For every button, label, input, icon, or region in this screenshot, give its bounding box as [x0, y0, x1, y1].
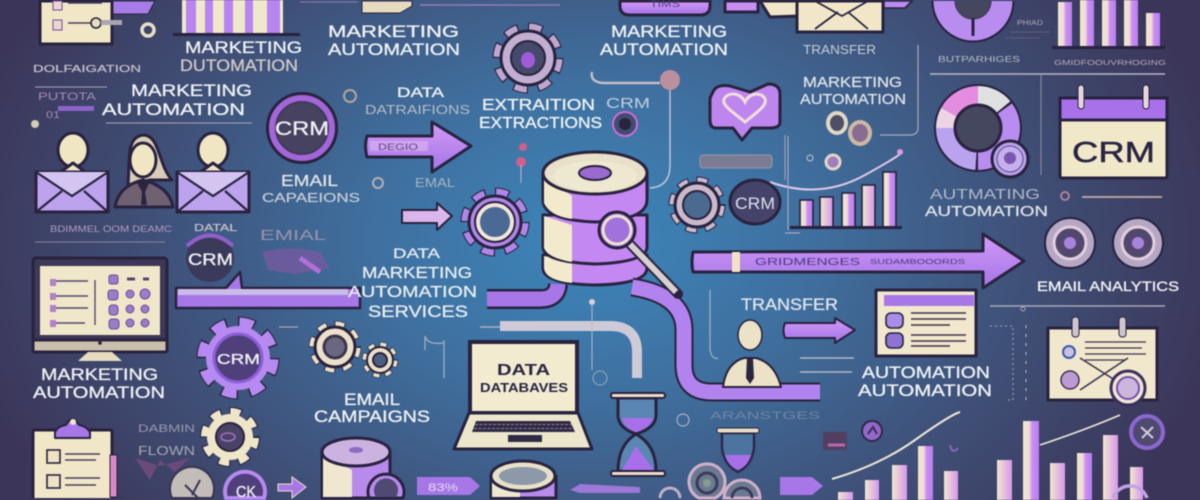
text: dabmin flown [135, 423, 195, 480]
text: transfer: TRANSFER [741, 295, 838, 314]
text: data marketing automation services [348, 245, 477, 321]
icon: lower left database [322, 438, 404, 498]
icon: CRM calendar: CRM [1072, 137, 1155, 169]
arrows: bottom purple tags: 83% [428, 482, 458, 494]
icon: woman in suit [115, 135, 173, 207]
arrow: big purple right arrow: GRIDMENGES [755, 257, 861, 268]
icon: CRM gear [203, 323, 273, 393]
text: data extractions faded: DATRAIFIONS [365, 102, 470, 117]
bar chart: bottom right [997, 415, 1143, 500]
icon: CRM badge: CRM [735, 194, 775, 213]
pill: top center [620, 0, 710, 15]
heading: marketing automation monitor: AUTOMATION [33, 383, 165, 402]
icon: twin cream gears [279, 325, 395, 375]
heading: marketing dutomation [180, 38, 302, 75]
heading: marketing automation centre: MARKETING [611, 22, 727, 41]
arrow: big purple right arrow: SUDAMBOOORDS [870, 259, 966, 266]
text: and email: EMAL [415, 175, 455, 190]
icon: laptop [454, 342, 592, 449]
pipe: database left outlet [487, 284, 558, 299]
arrow: pink right arrow [366, 122, 471, 172]
panel: form card [876, 290, 976, 356]
text: data marketing automation services: AUTOMATION [348, 284, 477, 301]
icon: lower centre database [491, 461, 556, 498]
icon: central database [543, 152, 647, 285]
heading: marketing automation right [800, 45, 918, 135]
text: automating automation [925, 186, 1048, 220]
smudged note: PUTOTA [38, 91, 97, 103]
text: faded crm [186, 234, 234, 282]
caption row under people: DATAL [194, 223, 238, 234]
arrow: small lilac arrow [402, 203, 452, 230]
icon: laptop: DATABAVES [480, 380, 568, 395]
text: faded challenges: ARANSTGES [710, 410, 820, 422]
text: faded email smudge [260, 227, 330, 274]
icons: bottom badges and arrow [170, 467, 306, 500]
icon: fader bar [700, 135, 785, 180]
icon: CRM calendar [1060, 85, 1167, 178]
icon: heart chat bubble [710, 84, 780, 140]
text: email capaeions: EMAIL [281, 173, 338, 190]
heading: marketing automation left: MARKETING [131, 81, 252, 100]
icon: CRM badge [730, 180, 780, 224]
icon: small rule node [1061, 192, 1162, 200]
bar chart: top left [173, 0, 300, 36]
bar chart: bottom middle [832, 412, 960, 500]
icon: small hourglass [717, 428, 759, 472]
icon: stacked papers [300, 1, 560, 13]
smudged note: 01 [46, 110, 61, 121]
heading: marketing automation centre: AUTOMATION [600, 40, 728, 59]
icon: badge and magnifier lower right [1113, 416, 1163, 498]
chart: top donut [944, 1, 1050, 38]
text: dabmin flown: FLOWN [138, 443, 195, 458]
icon: top-left clipboard [40, 1, 155, 44]
icon: small CRM target: CRM [606, 95, 650, 112]
icon: person and envelope right [177, 133, 249, 212]
text: email capaeions [262, 173, 360, 205]
text: email campaigns: EMAIL [344, 390, 400, 409]
text: extraction: EXTRACTIONS [479, 115, 602, 132]
icon: small bottom ornaments [823, 421, 958, 451]
heading: marketing automation top: AUTOMATION [328, 40, 460, 59]
bar chart: small trend [770, 149, 903, 229]
icon: right side line [785, 136, 800, 233]
icon: person and envelope left [36, 133, 108, 212]
icons: swirl rings [660, 464, 760, 498]
icon: lower clipboard [33, 419, 117, 498]
arrows: bottom purple tags [417, 477, 823, 495]
icon: CRM ring: CRM [275, 119, 329, 140]
text: small captions right: BUTPARHIGES [938, 55, 1020, 64]
text: transfer top: TRANSFER [803, 42, 876, 57]
text: data extractions faded: DATA [397, 84, 445, 100]
icon: top center gear [499, 29, 557, 87]
heading: marketing automation centre [600, 22, 728, 59]
heading: marketing automation right: AUTOMATION [800, 91, 906, 108]
heading: marketing dutomation: MARKETING [185, 38, 302, 57]
text: faded crm: CRM [188, 250, 233, 269]
text: and email [373, 143, 527, 190]
icon: CRM gear: CRM [217, 351, 260, 368]
text: automation automation: AUTOMATION [862, 363, 990, 382]
text: configuration: DOLFAIGATION [33, 64, 141, 75]
arrow: small lilac arrow right [784, 318, 855, 372]
icons: eye dots [807, 113, 870, 169]
text: automating automation: AUTMATING [930, 186, 1040, 203]
heading: marketing automation top: MARKETING [328, 22, 459, 41]
connector: node line [592, 70, 680, 188]
icon: CRM ring [268, 94, 336, 162]
smudged note [31, 91, 97, 128]
icons: email analytics targets [1045, 218, 1163, 268]
icon: hourglass [611, 393, 665, 476]
text: email capaeions: CAPAEIONS [262, 190, 360, 205]
text: small captions right [930, 55, 1166, 175]
icon: top envelope with hand [725, 1, 912, 32]
text: data marketing automation services: MARKETING [362, 265, 472, 282]
text: email campaigns [314, 390, 430, 426]
text: small captions right: GMIDFOOUVRHOGING [1054, 60, 1166, 67]
icon: dashed annotation [990, 306, 1165, 400]
text: faded email smudge: EMIAL [260, 227, 326, 244]
caption row under people [35, 223, 238, 242]
text: extraction [479, 97, 602, 132]
icon: desktop monitor [33, 258, 167, 361]
icon: right cream gear [673, 181, 721, 229]
text: email campaigns: CAMPAIGNS [314, 407, 430, 426]
heading: marketing automation left [35, 81, 252, 123]
icon: cream gear lower [205, 412, 255, 462]
icon: bracket hook [425, 290, 718, 426]
text: dabmin flown: DABMIN [138, 423, 195, 435]
text: automation automation [858, 363, 992, 400]
icon: laptop: DATA [497, 362, 551, 379]
text: automation automation: AUTOMATION [858, 381, 992, 400]
pipe: database left outlet fill [487, 284, 558, 299]
bar chart: top right [1052, 0, 1165, 49]
tube: grey connector [480, 299, 637, 385]
arrow: long left connector [176, 272, 360, 308]
icon: left purple gear [466, 193, 524, 251]
text: automating automation: AUTOMATION [925, 203, 1048, 220]
heading: marketing automation left: AUTOMATION [102, 100, 245, 119]
caption row under people: BDIMMEL OOM DEAMC [50, 224, 173, 234]
icon: magnifier on database [599, 212, 678, 294]
text: email analytics: EMAIL ANALYTICS [1037, 278, 1179, 294]
icon: note calendar with magnifier [1048, 317, 1157, 405]
arrow: big purple right arrow [692, 234, 1024, 288]
pipe: database right outlet [632, 287, 820, 392]
arrow: pink right arrow: DEGIO [378, 142, 418, 152]
heading: marketing automation monitor [33, 365, 165, 402]
heading: marketing dutomation: DUTOMATION [180, 56, 298, 75]
text: data marketing automation services: SERVICES [368, 302, 468, 321]
chart: top donut: PHIAD [1017, 20, 1043, 27]
icon: person with tie [723, 320, 781, 387]
chart: large donut [934, 84, 1028, 177]
text: extraction: EXTRAITION [482, 97, 595, 114]
heading: marketing automation top [328, 22, 460, 59]
text: data marketing automation services: DATA [393, 245, 441, 261]
text: data extractions faded [344, 84, 470, 117]
heading: marketing automation right: MARKETING [803, 74, 902, 91]
heading: marketing automation monitor: MARKETING [41, 365, 158, 384]
icon: small CRM target [606, 95, 650, 136]
